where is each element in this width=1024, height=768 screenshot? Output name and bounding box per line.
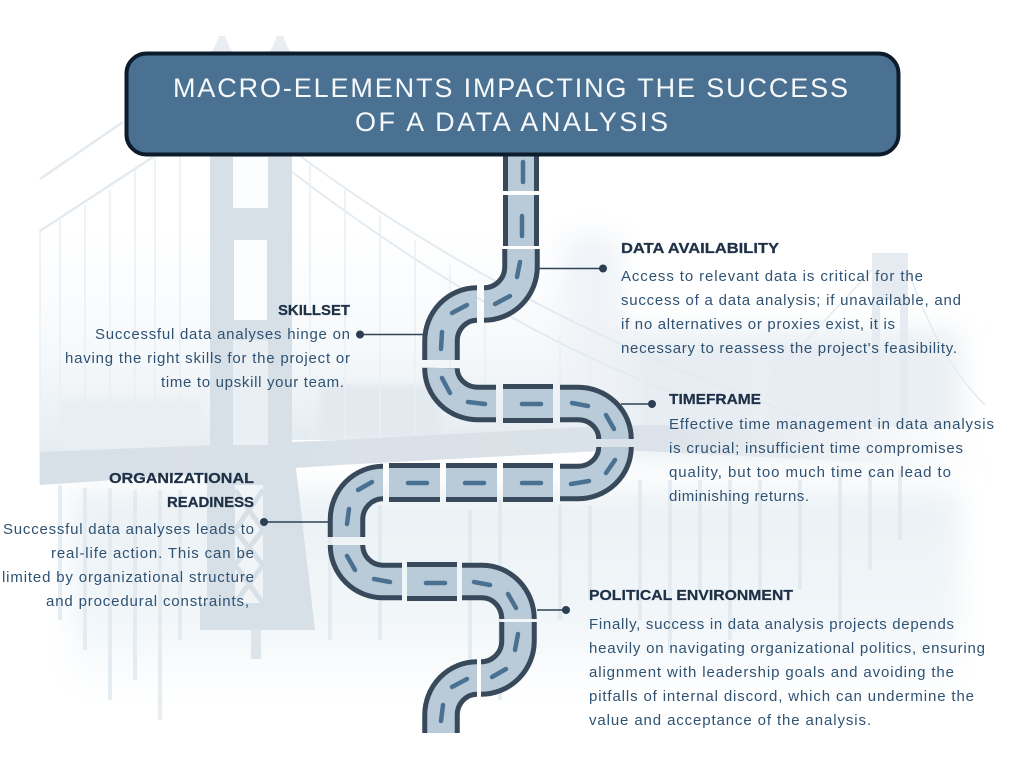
text block: organizational readiness: Successful data analyses leads to — [3, 521, 254, 538]
text block: skillset — [65, 302, 350, 391]
text block: political environment: Finally, success in data analysis projects depends — [589, 616, 954, 633]
text block: political environment: alignment with leadership goals and avoiding the — [589, 664, 954, 681]
road segment: curve six — [346, 482, 383, 537]
text block: organizational readiness — [2, 470, 254, 610]
text block: timeframe: TIMEFRAME — [669, 391, 761, 408]
road segment: curve two — [441, 304, 477, 360]
text block: political environment — [589, 587, 985, 729]
road: winding road path — [346, 156, 615, 733]
text block: organizational readiness: and procedural constraints, — [46, 593, 249, 610]
road segment: second straight — [521, 195, 522, 246]
text block: skillset: time to upskill your team. — [161, 374, 344, 391]
road segment: curve five — [560, 447, 615, 484]
text block: organizational readiness: limited by organizational structure — [2, 569, 254, 586]
connector: data availability — [539, 264, 607, 272]
text block: timeframe: diminishing returns. — [669, 488, 809, 505]
text block: organizational readiness: real-life action. This can be — [51, 545, 254, 562]
text block: political environment: POLITICAL ENVIRONMENT — [589, 587, 793, 604]
text block: timeframe: Effective time management in data analysis — [669, 416, 994, 433]
text block: political environment: heavily on navigating organizational politics, ensuring — [589, 640, 985, 657]
title banner: MACRO-ELEMENTS IMPACTING THE SUCCESS — [173, 73, 848, 103]
road segment: curve ten — [441, 678, 477, 733]
road segment: curve one — [484, 249, 521, 304]
text block: skillset: Successful data analyses hinge on — [95, 326, 350, 343]
road segment: curve eight — [462, 582, 518, 619]
road segment: curve four — [560, 403, 615, 439]
road segment: curve seven — [346, 545, 402, 582]
text block: data availability: DATA AVAILABILITY — [621, 240, 779, 257]
text block: organizational readiness: ORGANIZATIONAL — [109, 470, 254, 487]
text block: data availability: necessary to reassess the project's feasibility. — [621, 340, 957, 357]
road segment: curve nine — [481, 622, 518, 678]
connector: political environment — [537, 606, 570, 614]
text block: timeframe: quality, but too much time can lead to — [669, 464, 951, 481]
road segment: straights — [389, 463, 553, 502]
connector: organizational readiness — [260, 518, 328, 526]
text block: data availability: success of a data analysis; if unavailable, and — [621, 292, 961, 309]
text block: timeframe — [669, 391, 994, 505]
connector: timeframe — [621, 400, 656, 408]
text block: political environment: value and acceptance of the analysis. — [589, 712, 871, 729]
connector: skillset — [356, 330, 423, 338]
text block: timeframe: is crucial; insufficient time compromises — [669, 440, 963, 457]
text block: skillset: having the right skills for the project or — [65, 350, 350, 367]
text block: political environment: pitfalls of internal discord, which can undermine the — [589, 688, 974, 705]
text block: data availability: if no alternatives or proxies exist, it is — [621, 316, 895, 333]
title banner: OF A DATA ANALYSIS — [355, 107, 668, 137]
road segment: straight lower — [407, 582, 457, 583]
text block: data availability — [621, 240, 961, 357]
text block: skillset: SKILLSET — [278, 302, 350, 319]
text block: data availability: Access to relevant data is critical for the — [621, 268, 923, 285]
title banner — [126, 54, 898, 154]
text block: organizational readiness: READINESS — [167, 494, 254, 511]
road segment: top straight — [521, 156, 523, 191]
road segment: curve three — [441, 368, 496, 404]
road segment: straight — [503, 384, 553, 424]
